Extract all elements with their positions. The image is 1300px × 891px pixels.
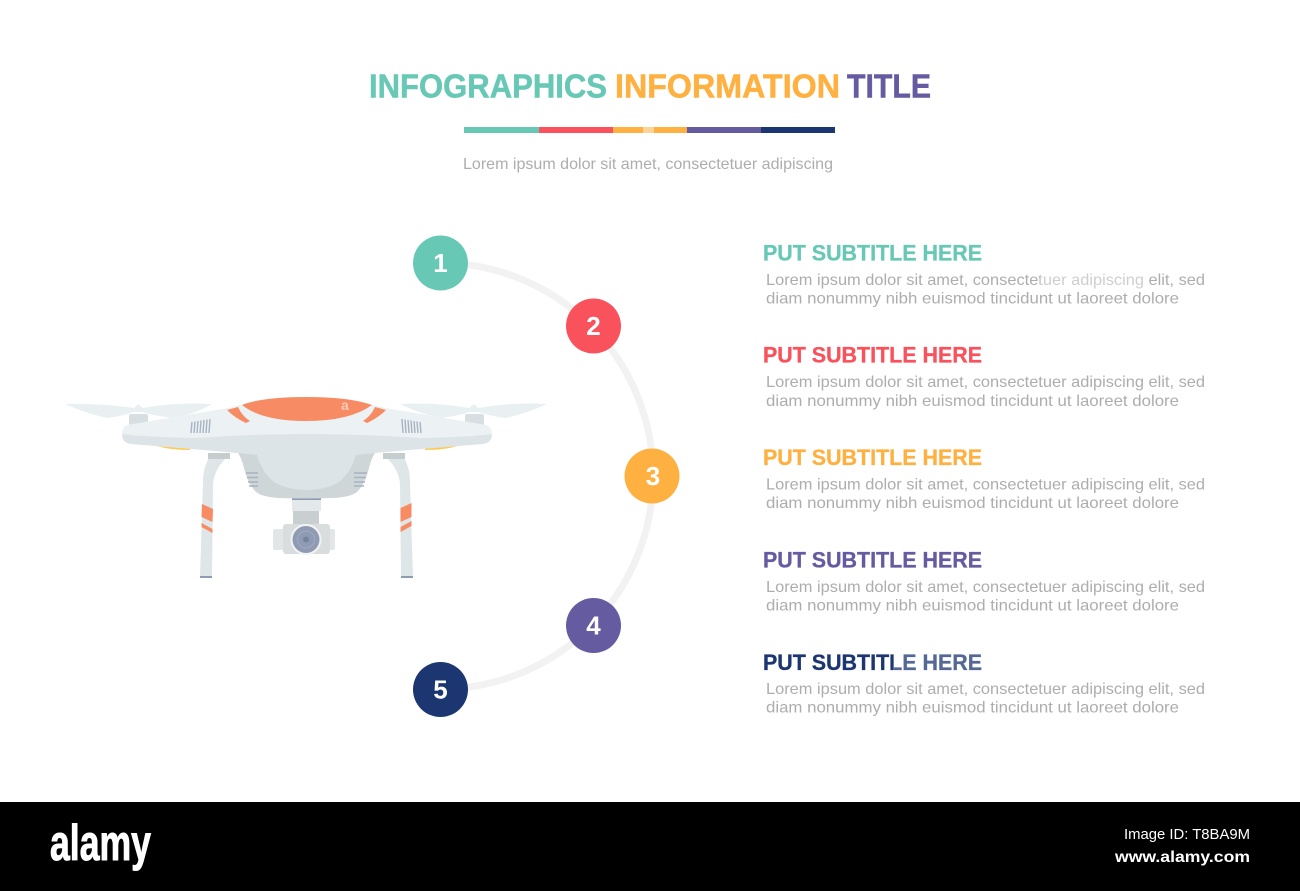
- curved connector arc: [440, 263, 653, 689]
- title: INFORMATION: [615, 68, 840, 104]
- text block 3: PUT SUBTITLE HERE: [763, 445, 982, 470]
- canopy side accents: [227, 407, 386, 423]
- step marker 2: 2: [586, 311, 601, 341]
- alamy logo: alamy: [50, 815, 151, 871]
- step marker 1: [413, 236, 468, 290]
- text block 4: [763, 548, 1205, 614]
- text block 4: Lorem ipsum dolor sit amet, consectetuer adipiscing elit, sed: [766, 579, 1205, 596]
- text block 3: diam nonummy nibh euismod tincidunt ut laoreet dolore: [766, 495, 1179, 512]
- drone body: [122, 397, 492, 498]
- canopy watermark: a: [341, 397, 349, 413]
- text block 4: PUT SUBTITLE HERE: [763, 548, 982, 572]
- text block 5: [763, 650, 1205, 716]
- text block 2: diam nonummy nibh euismod tincidunt ut laoreet dolore: [766, 393, 1179, 410]
- step marker 3: [624, 448, 680, 504]
- step marker 4: 4: [586, 610, 601, 640]
- title: TITLE: [847, 68, 931, 104]
- title: [369, 68, 931, 104]
- icon: left landing leg: [200, 453, 230, 578]
- text block 2: [763, 342, 1205, 410]
- text block 3: Lorem ipsum dolor sit amet, consectetuer adipiscing elit, sed: [766, 476, 1205, 494]
- website: www.alamy.com: [1114, 849, 1250, 866]
- body vents: [191, 419, 421, 486]
- step marker 5: 5: [433, 674, 448, 704]
- drone illustration: [65, 397, 547, 578]
- text block 1: Lorem ipsum dolor sit amet, consectetuer adipiscing elit, sed: [766, 272, 1205, 289]
- text block 5: diam nonummy nibh euismod tincidunt ut laoreet dolore: [766, 700, 1179, 716]
- text block 2: PUT SUBTITLE HERE: [763, 342, 982, 368]
- step marker 4: [566, 598, 621, 653]
- text block 4: diam nonummy nibh euismod tincidunt ut laoreet dolore: [766, 598, 1179, 614]
- text block 2: Lorem ipsum dolor sit amet, consectetuer adipiscing elit, sed: [766, 374, 1205, 391]
- image id: Image ID: T8BA9M: [1124, 826, 1250, 843]
- subtitle text: Lorem ipsum dolor sit amet, consectetuer adipiscing: [463, 156, 833, 173]
- icon: left propeller: [65, 404, 212, 427]
- step marker 2: [566, 298, 621, 354]
- canopy: [242, 397, 372, 421]
- step marker 3: 3: [646, 461, 660, 491]
- title colour bar: [464, 127, 835, 133]
- title: INFOGRAPHICS: [369, 68, 607, 104]
- text block 5: Lorem ipsum dolor sit amet, consectetuer adipiscing elit, sed: [766, 681, 1205, 698]
- icon: right landing leg: [383, 453, 413, 578]
- icon: camera gimbal: [273, 497, 335, 555]
- watermark footer bar: [0, 802, 1300, 891]
- icon: yellow lights: [152, 444, 462, 450]
- text block 3: [763, 445, 1205, 512]
- text block 1: [763, 240, 1205, 308]
- step marker 5: [413, 662, 468, 717]
- step marker 1: 1: [433, 248, 448, 278]
- icon: right propeller: [400, 404, 547, 427]
- text block 1: PUT SUBTITLE HERE: [763, 240, 982, 266]
- text block 1: diam nonummy nibh euismod tincidunt ut laoreet dolore: [766, 290, 1179, 308]
- text block 5: PUT SUBTITLE HERE: [763, 650, 982, 675]
